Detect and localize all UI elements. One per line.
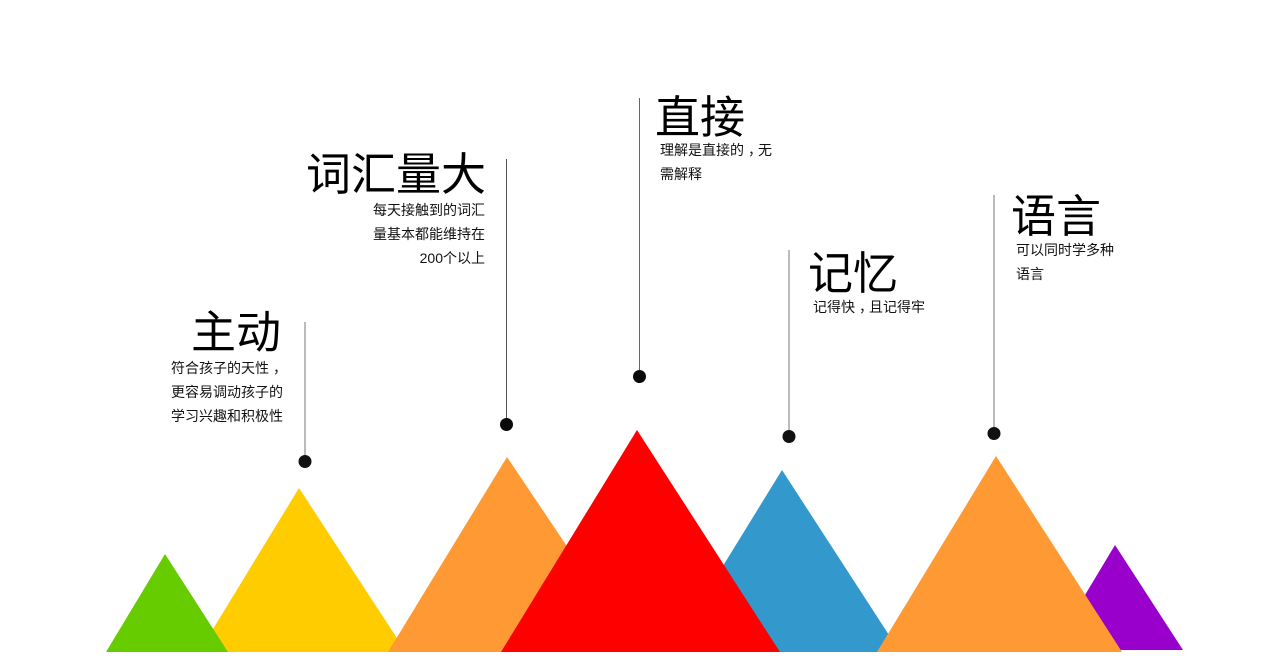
description: 语言: 可以同时学多种 [1016,242,1114,258]
text block: 直接 [655,92,772,182]
pointer: 主动 [298,322,312,468]
heading: 词汇量大: 词汇量大 [306,149,486,200]
triangle: orange right [877,456,1122,652]
description: 主动: 学习兴趣和积极性 [171,408,283,424]
pointer: 词汇量大 [500,159,513,431]
triangle: orange left [388,457,638,652]
triangle: red [501,430,780,652]
text block: 语言 [1011,191,1114,282]
triangle: yellow [199,488,406,652]
triangle: green [106,554,228,652]
description: 主动: 符合孩子的天性 ， [171,360,287,376]
heading: 记忆: 记忆 [808,248,898,299]
pointer: 记忆 [782,250,796,443]
description: 词汇量大: 量基本都能维持在 [373,226,485,242]
description: 直接: 理解是直接的 ，无 [660,142,772,158]
description: 直接: 需解释 [660,166,702,182]
description: 词汇量大 [373,202,485,266]
description: 记忆: 记得快 ，且记得牢 [813,299,925,315]
triangle: purple [1052,545,1183,650]
description: 语言: 语言 [1016,266,1044,282]
heading: 主动: 主动 [191,307,281,358]
description: 直接 [660,142,772,182]
description: 语言 [1016,242,1114,282]
heading: 直接: 直接 [655,92,745,143]
heading: 语言: 语言 [1011,191,1101,242]
description: 主动 [171,360,287,424]
triangle: blue [670,470,900,652]
text block: 主动 [171,307,287,424]
pointer: 语言 [988,195,1000,440]
description: 词汇量大: 每天接触到的词汇 [373,202,485,218]
text block: 记忆 [808,248,925,315]
description: 主动: 更容易调动孩子的 [171,384,283,400]
description: 词汇量大: 200个以上 [420,250,485,266]
pointer: 直接 [633,98,646,383]
text block: 词汇量大 [306,149,486,266]
